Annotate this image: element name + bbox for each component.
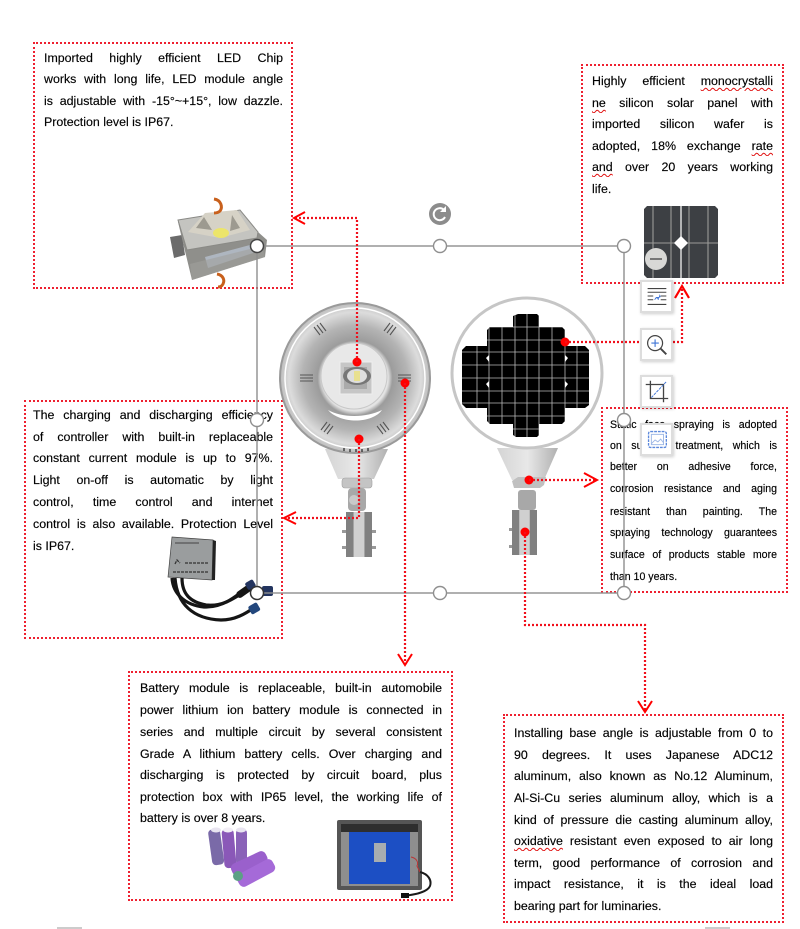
text: installing base description: Al-Si-Cu series aluminum alloy, which is a bbox=[514, 791, 773, 805]
text: installing base description: kind of pressure die casting aluminum alloy, bbox=[514, 813, 773, 827]
text: controller description: constant current module is up to 97%. bbox=[33, 451, 273, 465]
panel: surface treatment bbox=[601, 407, 788, 593]
text: LED chip description: is adjustable with -15°~+15°, low dazzle. bbox=[44, 94, 283, 108]
icon: minus control bbox=[645, 248, 667, 270]
text: surface treatment description: Static face spraying is adopted bbox=[610, 419, 777, 431]
toolbar button: image bbox=[640, 423, 673, 456]
toolbar button: text wrap bbox=[640, 280, 673, 313]
text: surface treatment description: than 10 years. bbox=[610, 571, 677, 583]
icon: controller box with cables bbox=[168, 537, 273, 620]
text: surface treatment description: on surface treatment, which is bbox=[610, 440, 777, 452]
text: solar panel description: and over 20 years working bbox=[592, 160, 773, 174]
icon: lithium cells bbox=[208, 828, 277, 889]
text: controller description bbox=[33, 408, 273, 553]
text: surface treatment description: better on adhesive force, bbox=[610, 461, 777, 473]
text: controller description: of controller with built-in replaceable bbox=[33, 430, 273, 444]
text: battery description: Grade A lithium battery cells. Over charging and bbox=[140, 747, 442, 761]
text: surface treatment description: spraying technology guarantees bbox=[610, 527, 777, 539]
lamp: front view bbox=[280, 303, 430, 557]
text: LED chip description: Protection level is IP67. bbox=[44, 115, 173, 129]
text: battery description: Battery module is replaceable, built-in automobile bbox=[140, 681, 442, 695]
panel: controller bbox=[24, 400, 283, 639]
text: installing base description: bearing part for luminaries. bbox=[514, 899, 661, 913]
text: controller description: The charging and discharging efficiency bbox=[33, 408, 273, 422]
text: installing base description: impact resistance, it is the ideal load bbox=[514, 877, 773, 891]
arrow: surface treatment callout bbox=[524, 473, 597, 487]
text: solar panel description: ne silicon solar panel with bbox=[592, 96, 773, 110]
text: battery description: protection box with IP65 level, the working life of bbox=[140, 790, 442, 804]
text: solar panel description: adopted, 18% exchange rate bbox=[592, 139, 773, 153]
text: LED chip description: works with long life, LED module angle bbox=[44, 72, 283, 86]
text: surface treatment description: surface of products stable more bbox=[610, 549, 777, 561]
toolbar button: crop bbox=[640, 375, 673, 408]
icon: solar panel module photo bbox=[644, 206, 718, 278]
text: controller description: Light on-off is automatic by light bbox=[33, 473, 273, 487]
arrow: battery callout bbox=[398, 378, 412, 665]
text: controller description: is IP67. bbox=[33, 539, 74, 553]
text: solar panel description bbox=[592, 74, 773, 196]
arrow: installing base callout bbox=[520, 528, 652, 712]
arrow: LED chip callout bbox=[294, 212, 362, 366]
text: LED chip description bbox=[44, 51, 283, 129]
text: LED chip description: Imported highly efficient LED Chip bbox=[44, 51, 283, 65]
panel: installing base bbox=[503, 714, 784, 923]
text: battery description: discharging is protected by circuit board, plus bbox=[140, 768, 442, 782]
text: installing base description: term, good performance of corrosion and bbox=[514, 856, 773, 870]
toolbar button: zoom bbox=[640, 328, 673, 361]
text: controller description: control is also available. Protection Level bbox=[33, 517, 273, 531]
text: battery description: battery is over 8 years. bbox=[140, 811, 265, 825]
text: installing base description: 90 degrees. It uses Japanese ADC12 bbox=[514, 748, 773, 762]
text: solar panel description: life. bbox=[592, 182, 611, 196]
text: battery description: series and multiple circuit by several consistent bbox=[140, 725, 442, 739]
panel: LED chip bbox=[33, 42, 293, 289]
icon: rotate handle bbox=[429, 203, 451, 225]
icon: LED module photo bbox=[170, 199, 267, 287]
arrow: solar panel callout bbox=[560, 286, 689, 346]
text: battery description: power lithium ion battery module is connected in bbox=[140, 703, 442, 717]
text: installing base description: oxidative resistant even exposed to air long bbox=[514, 834, 773, 848]
text: solar panel description: imported silicon wafer is bbox=[592, 117, 773, 131]
text: installing base description: Installing base angle is adjustable from 0 to bbox=[514, 726, 773, 740]
selection frame with handles bbox=[250, 240, 630, 600]
text: surface treatment description bbox=[610, 419, 777, 583]
icon: battery box bbox=[337, 820, 431, 898]
text: surface treatment description: corrosion resistance and aging bbox=[610, 483, 777, 495]
panel: solar panel bbox=[581, 64, 784, 284]
icon: solar cell array bbox=[462, 314, 589, 437]
text: installing base description bbox=[514, 726, 773, 913]
text: battery description bbox=[140, 681, 442, 825]
text: installing base description: aluminum, also known as No.12 Aluminum, bbox=[514, 769, 773, 783]
text: solar panel description: Highly efficient monocrystalli bbox=[592, 74, 773, 88]
panel: battery bbox=[128, 671, 453, 901]
lamp: rear view with solar array bbox=[452, 298, 602, 555]
arrow: controller callout bbox=[284, 434, 364, 524]
text: surface treatment description: resistant than painting. The bbox=[610, 506, 777, 518]
text: controller description: control, time control and internet bbox=[33, 495, 273, 509]
